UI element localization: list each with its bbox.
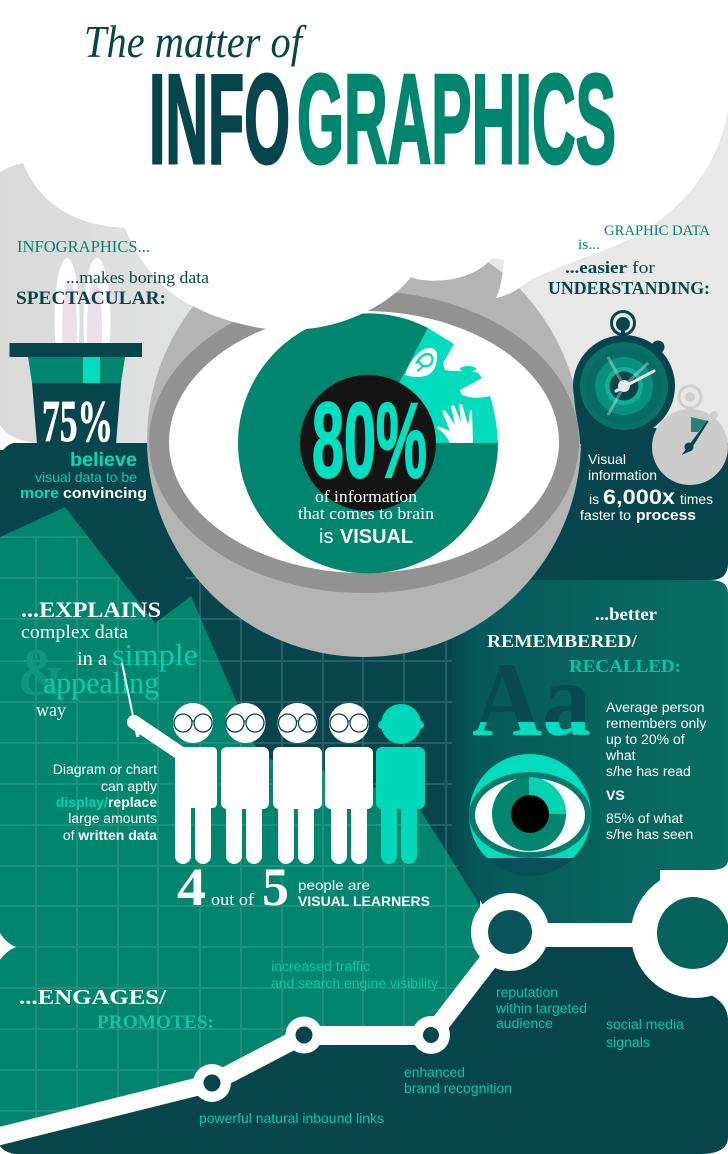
text: average person remembers: s/he has seen (606, 826, 693, 842)
text: diagram or chart: of written data (63, 827, 157, 843)
chart node 1 (193, 1064, 231, 1102)
chart node 2 (286, 1016, 322, 1054)
text: average person remembers: remembers only (606, 715, 706, 731)
icon: Aa letters: Aa (472, 641, 591, 758)
pie chart iris (238, 313, 498, 573)
icon: person one (173, 703, 217, 864)
white notch between panels (0, 933, 16, 960)
icon: pointer and arm (122, 663, 180, 753)
panel: remembered recalled teal (452, 580, 728, 945)
chart labels: increased traffic (271, 959, 370, 974)
text: of information (298, 487, 434, 548)
text: explains heading: & (18, 634, 65, 710)
icon: hand (437, 404, 473, 443)
text: easier for understanding: GRAPHIC DATA (604, 223, 710, 239)
stat: 4 out of 5 people: VISUAL LEARNERS (298, 893, 430, 909)
icon: mouth and eye (460, 366, 476, 372)
icon: Aa letters: Aa (472, 641, 591, 758)
chart labels: audience (496, 1016, 553, 1031)
stat: 4 out of 5 people: out of (211, 890, 254, 909)
text: easier for understanding: UNDERSTANDING: (548, 278, 710, 298)
text: easier for understanding (548, 223, 710, 298)
text: of information: is (319, 526, 333, 548)
text: average person remembers (605, 699, 706, 842)
panel: dark understanding panel (450, 443, 728, 580)
chart node 5 (631, 870, 728, 998)
text: explains heading: simple (112, 637, 198, 672)
stat: 4 out of 5 people: 5 (262, 857, 289, 917)
text: of information: of information (315, 487, 417, 506)
text: average person remembers: up to 20% of (606, 731, 685, 747)
chart labels: reputation (496, 985, 558, 1000)
text: believe more convincing: visual data to be (35, 469, 137, 485)
panel: dark diagonal stripe (0, 450, 190, 623)
text: 6,000x times faster: information (588, 467, 657, 483)
chart labels (199, 959, 684, 1126)
chart labels: within targeted (495, 1001, 587, 1016)
chart labels: brand recognition (404, 1081, 512, 1096)
text: explains heading: appealing (43, 665, 159, 700)
line chart (0, 870, 728, 1137)
text: diagram or chart: display/replace (56, 794, 157, 810)
text: 6,000x times faster: process (636, 507, 696, 524)
stat 75%: 75% (42, 388, 113, 454)
text: 6,000x times faster: 6,000x (603, 486, 675, 509)
stat: 4 out of 5 people: people are (298, 877, 370, 893)
panel: gray left background (0, 150, 210, 443)
icon: rabbit ears (50, 258, 120, 383)
text: believe more convincing: convincing (63, 486, 147, 502)
text: explains heading: in a (77, 648, 107, 670)
text: engages promotes (19, 985, 214, 1033)
text: of information: that comes to brain (298, 504, 434, 523)
icon: person two (221, 703, 269, 864)
panel: engages dark base (0, 935, 728, 1154)
icon: magician hat (10, 343, 142, 444)
text: makes boring data spectacular (16, 237, 209, 309)
text: 6,000x times faster: faster to (580, 507, 631, 523)
text: average person remembers: s/he has read (606, 763, 691, 779)
heading: better remembered recalled (487, 604, 681, 676)
chart labels: signals (606, 1035, 650, 1050)
text: explains heading (18, 597, 198, 721)
pupil circle (300, 375, 436, 511)
text: diagram or chart: Diagram or chart (53, 761, 157, 777)
icon: ear (405, 348, 437, 377)
text: explains heading: way (36, 700, 66, 721)
heading: better remembered recalled: RECALLED: (569, 656, 681, 676)
icon: eye (469, 754, 591, 876)
text: average person remembers: VS (606, 787, 625, 803)
icon: big stopwatch (573, 312, 675, 444)
text: engages promotes: PROMOTES: (97, 1012, 214, 1033)
panel: explains and engages green area (0, 507, 510, 1150)
big stat 80%: 80% (312, 380, 427, 500)
text: explains heading: complex data (21, 622, 129, 643)
text: makes boring data spectacular: ...makes boring data (66, 268, 209, 287)
stat: 4 out of 5 people (177, 857, 430, 917)
text: makes boring data spectacular: INFOGRAPHICS... (17, 237, 150, 256)
chart labels: and search engine visibility (271, 976, 438, 991)
icon: small stopwatch (652, 386, 728, 485)
text: 6,000x times faster: Visual (588, 451, 626, 467)
text: believe more convincing: believe (70, 450, 137, 471)
chart labels: social media (606, 1017, 684, 1032)
eye socket (147, 223, 581, 657)
text: believe more convincing (20, 450, 147, 502)
panel: explains section dark base (0, 535, 480, 945)
text: of information: VISUAL (340, 526, 413, 548)
chart node 3 (412, 1016, 450, 1054)
text: average person remembers: what (605, 747, 636, 763)
panel: dark band top left (0, 443, 210, 600)
text: average person remembers: 85% of what (606, 810, 683, 826)
title: The matter of (84, 16, 307, 67)
icon: Aa letters (472, 665, 590, 736)
icon: person five highlighted (376, 704, 425, 864)
chart labels: enhanced (404, 1065, 465, 1080)
white corner bottom left (0, 1146, 14, 1154)
text: believe more convincing: more (20, 486, 59, 502)
text: easier for understanding: is... (578, 237, 600, 253)
white speech cloud (0, 0, 728, 330)
icon: person three (273, 703, 322, 864)
text: makes boring data spectacular: SPECTACULAR: (16, 288, 166, 309)
text: average person remembers: Average person (606, 699, 705, 715)
heading: better remembered recalled: REMEMBERED/ (487, 631, 638, 651)
text: diagram or chart (53, 761, 157, 843)
text: diagram or chart: large amounts (68, 810, 157, 826)
text: diagram or chart: can aptly (101, 778, 157, 794)
heading: better remembered recalled: ...better (595, 604, 657, 624)
text: engages promotes: ...ENGAGES/ (19, 985, 167, 1009)
title: INFO (149, 48, 290, 190)
text: explains heading: ...EXPLAINS (21, 597, 161, 622)
text: easier for understanding: for (632, 258, 655, 277)
stat: 4 out of 5 people: 4 (177, 857, 206, 917)
chart labels: powerful natural inbound links (199, 1111, 384, 1126)
icon: person four (325, 703, 373, 864)
title (84, 16, 616, 190)
panel: gray right background (470, 80, 728, 450)
text: 6,000x times faster (580, 451, 713, 524)
chart node 4 (471, 893, 549, 971)
text: 6,000x times faster: is (589, 491, 599, 507)
text: easier for understanding: ...easier (565, 258, 627, 277)
text: 6,000x times faster: times (680, 491, 713, 507)
